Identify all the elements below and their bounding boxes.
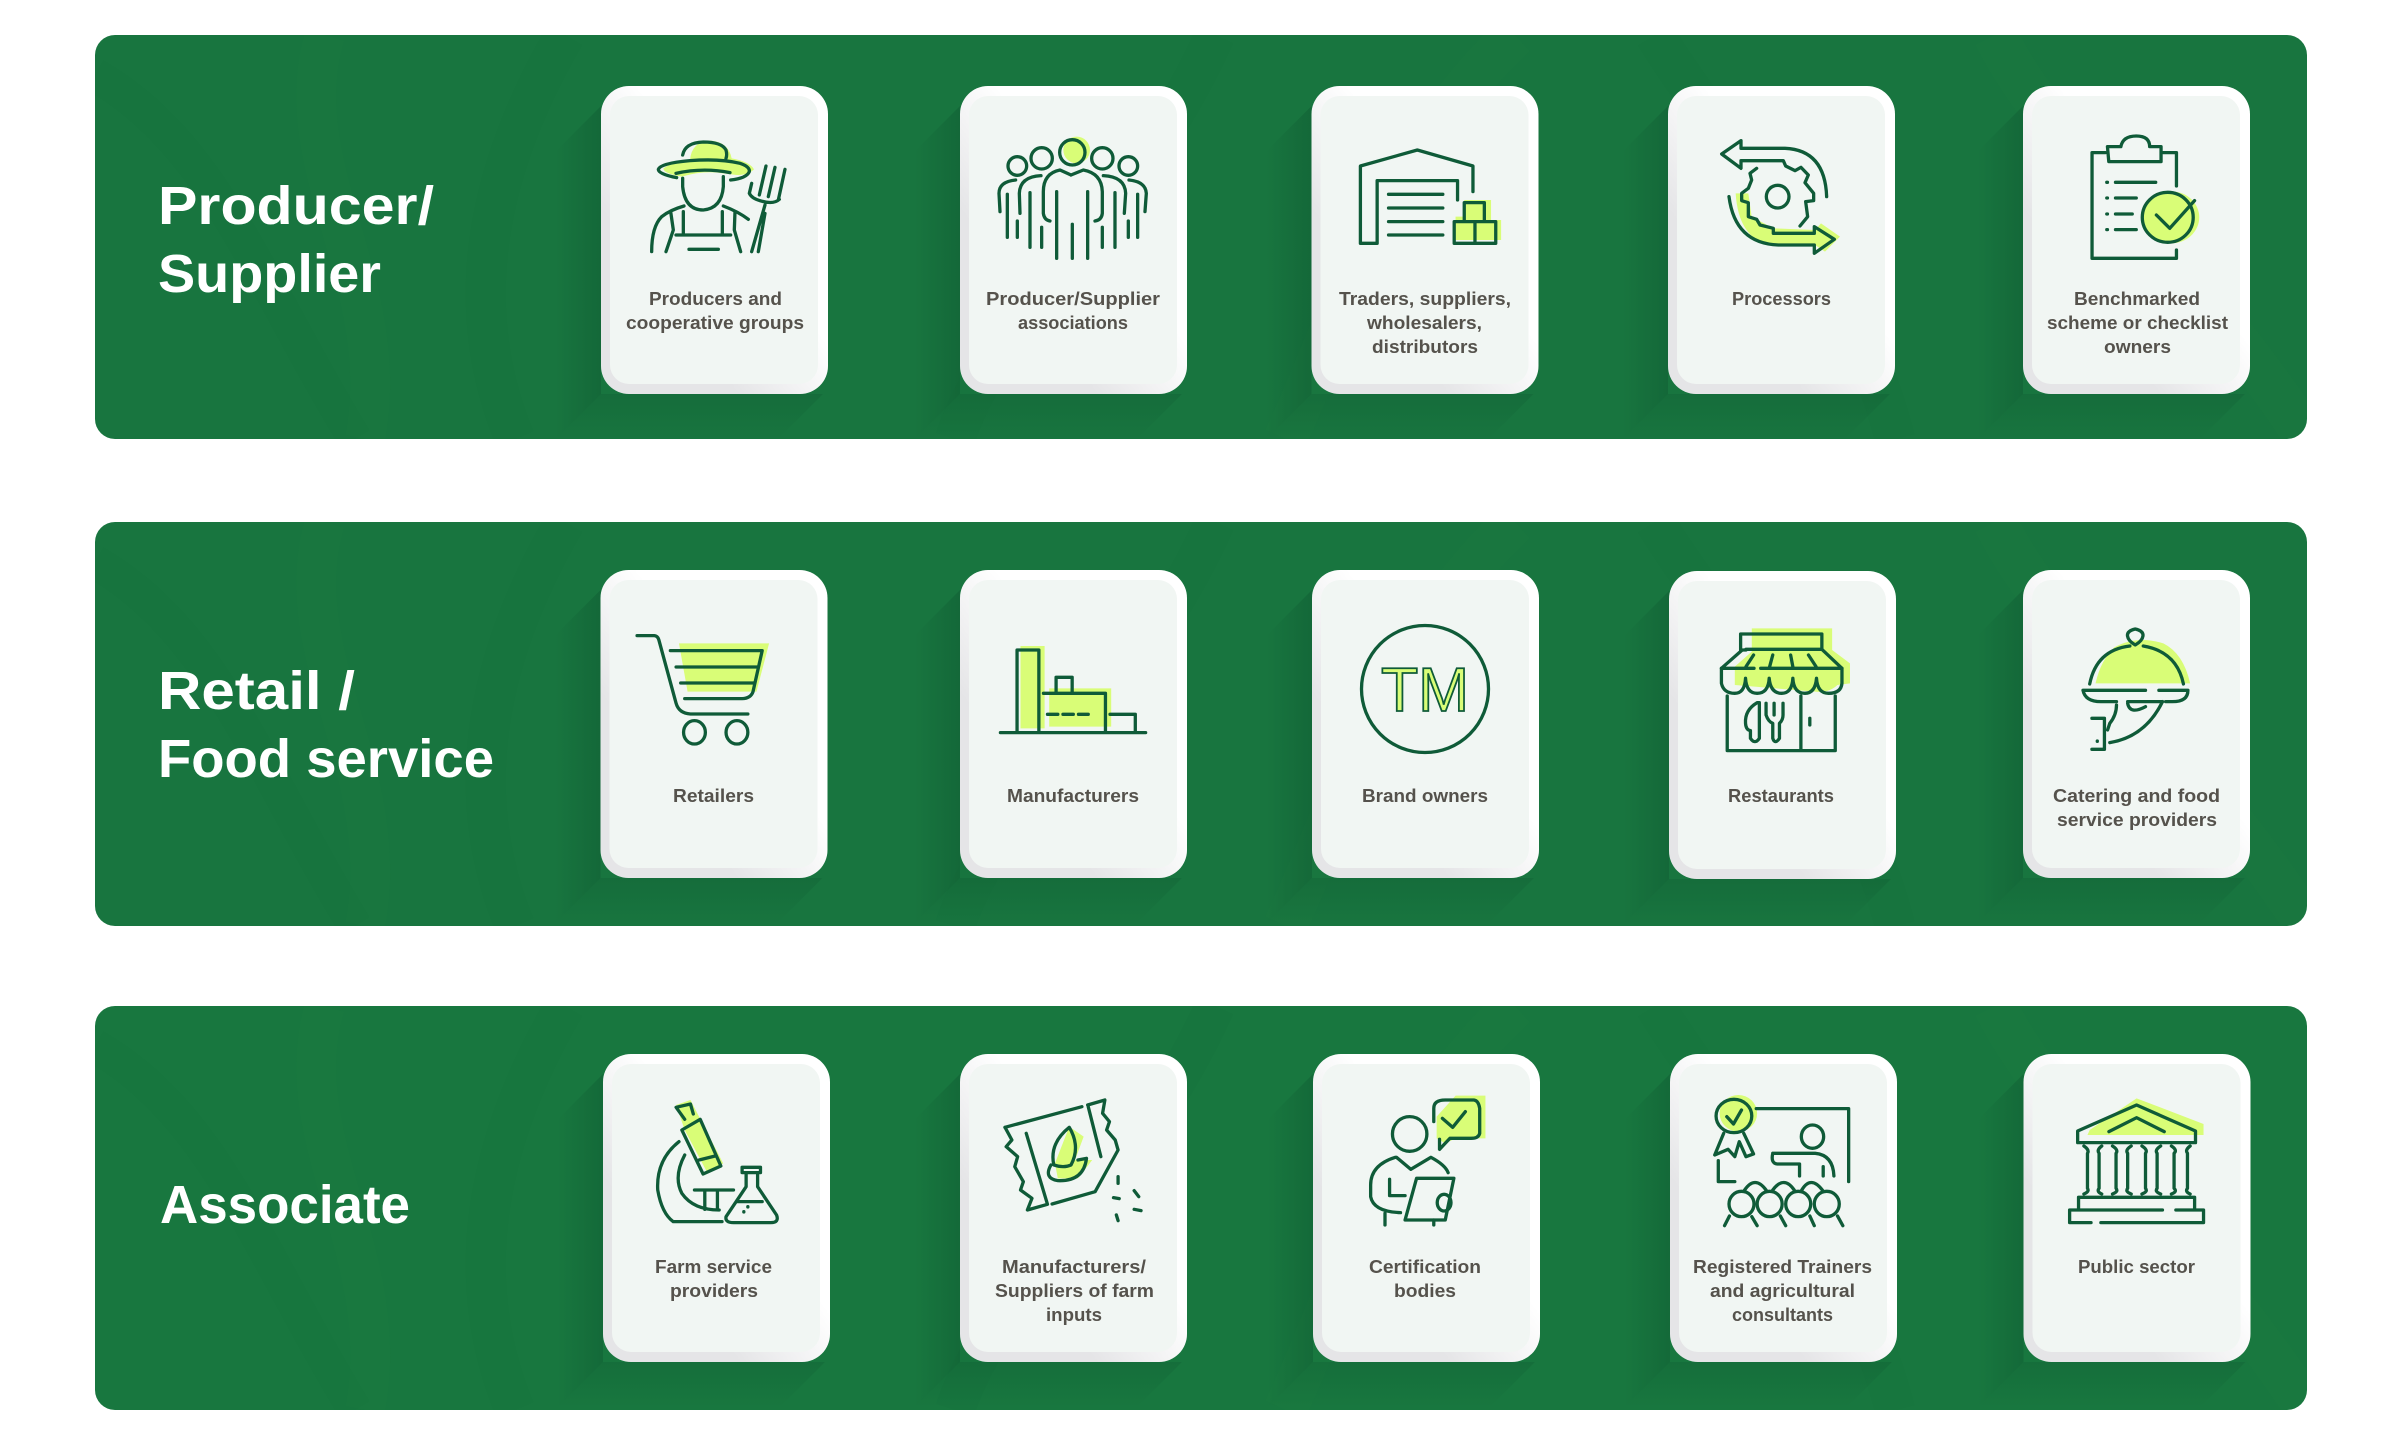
label: Manufacturers/ (1002, 1256, 1146, 1277)
label: scheme or checklist (2047, 312, 2228, 333)
label: Manufacturers (1007, 785, 1139, 806)
label (626, 288, 804, 333)
heading: producer/supplier: Producer/ (158, 176, 434, 236)
panel: associate (95, 1006, 2307, 1410)
label (1339, 288, 1511, 357)
icon: restaurant storefront (1721, 628, 1850, 751)
label: Catering and food (2053, 785, 2220, 806)
label: bodies (1394, 1280, 1456, 1301)
icon: classical government building (2070, 1098, 2204, 1223)
heading: producer/supplier (158, 176, 434, 304)
label: wholesalers, (1366, 312, 1482, 333)
panel: producer/supplier (95, 35, 2307, 439)
panel: retail / food service (95, 522, 2307, 926)
label: Benchmarked (2074, 288, 2200, 309)
icon: group of people (999, 137, 1146, 258)
label: providers (670, 1280, 758, 1301)
icon: warehouse with boxes (1360, 150, 1501, 243)
icon: microscope and flask (658, 1100, 777, 1223)
label: distributors (1372, 336, 1478, 357)
icon: trademark circle (1362, 626, 1488, 752)
card: retailers (556, 570, 828, 923)
label: Retailers (673, 785, 754, 806)
label: Registered Trainers (1693, 1256, 1872, 1277)
card: processors (1623, 86, 1895, 439)
card: manufacturers/suppliers of farm inputs (915, 1054, 1187, 1407)
label: Public sector (2078, 1256, 2195, 1277)
label: owners (2104, 336, 2171, 357)
label: Farm service (655, 1256, 772, 1277)
icon: farmer with pitchfork (652, 141, 785, 252)
label (1369, 1256, 1481, 1301)
card: traders, suppliers, wholesalers, distributors (1266, 86, 1538, 439)
icon: auditor with speech bubble (1371, 1096, 1485, 1225)
card: manufacturers (915, 570, 1187, 923)
label: service providers (2057, 809, 2217, 830)
icon: serving cloche on hand (2083, 629, 2190, 749)
heading: retail / food service: Retail / (158, 661, 355, 721)
icon: seed packet (1005, 1100, 1141, 1221)
label: Certification (1369, 1256, 1481, 1277)
icon: clipboard with checkmark (2092, 136, 2199, 258)
heading: producer/supplier: Supplier (158, 244, 381, 304)
label: Traders, suppliers, (1339, 288, 1511, 309)
label: cooperative groups (626, 312, 804, 333)
label: Producer/Supplier (986, 288, 1160, 309)
label (655, 1256, 772, 1301)
card: certification bodies (1268, 1054, 1540, 1407)
label: Restaurants (1728, 785, 1834, 806)
label: Producers and (649, 288, 782, 309)
card: brand owners (1267, 570, 1539, 923)
card: farm service providers (558, 1054, 830, 1407)
heading: associate: Associate (160, 1175, 410, 1235)
label: and agricultural (1710, 1280, 1855, 1301)
label: consultants (1732, 1304, 1833, 1325)
label: Suppliers of farm (995, 1280, 1154, 1301)
icon: trainer with audience and rosette (1715, 1095, 1849, 1226)
card: restaurants (1624, 571, 1896, 924)
label (2053, 785, 2220, 830)
label: Processors (1732, 288, 1831, 309)
label (2047, 288, 2228, 357)
icon: gear with cycle arrows (1722, 141, 1840, 253)
card: producer/supplier associations (915, 86, 1187, 439)
card: catering and food service providers (1978, 570, 2250, 923)
icon: factory (1000, 646, 1146, 733)
card: public sector (1978, 1054, 2250, 1407)
icon: trademark circle: TM (1381, 656, 1469, 725)
heading: retail / food service (158, 661, 494, 789)
label: Brand owners (1362, 785, 1488, 806)
heading: retail / food service: Food service (158, 729, 494, 789)
icon: shopping cart (637, 636, 769, 744)
label (986, 288, 1160, 333)
label: associations (1018, 312, 1128, 333)
card: producers and cooperative groups (556, 86, 828, 439)
label: inputs (1046, 1304, 1102, 1325)
label (1693, 1256, 1872, 1325)
label (995, 1256, 1154, 1325)
card: registered trainers and agricultural consultants (1625, 1054, 1897, 1407)
card: benchmarked scheme or checklist owners (1978, 86, 2250, 439)
